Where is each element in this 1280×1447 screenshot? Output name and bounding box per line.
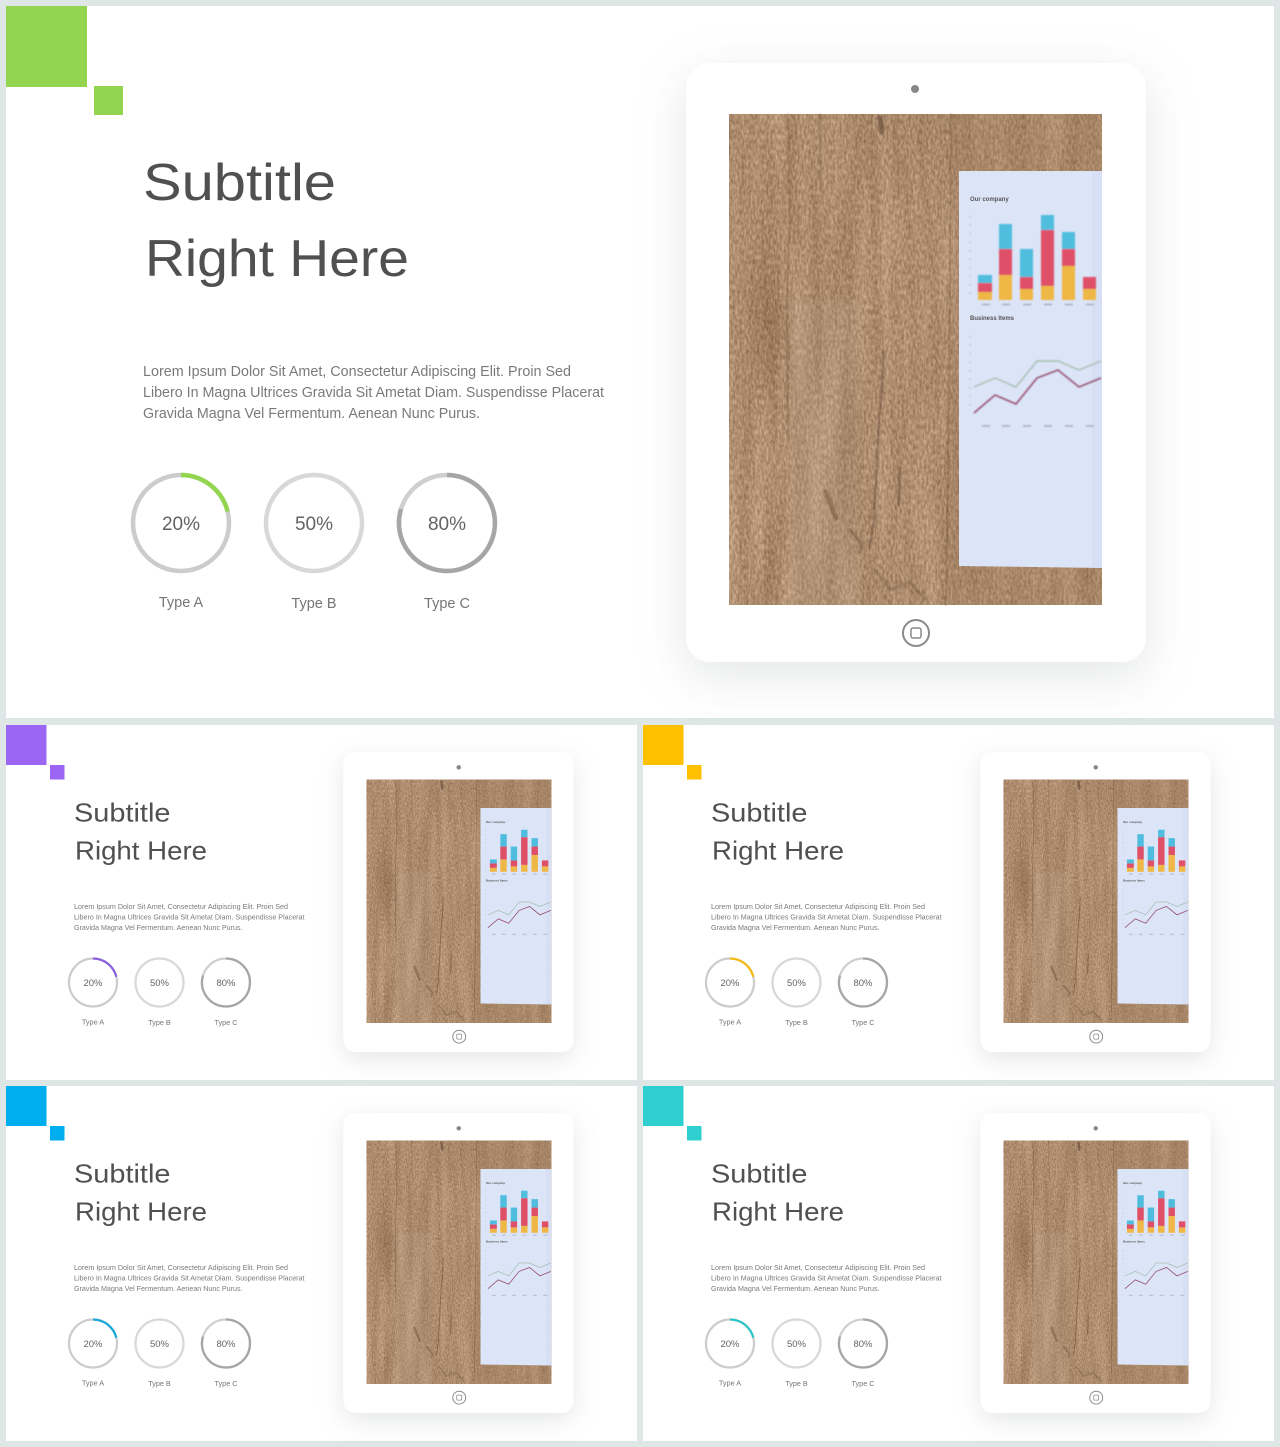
chart: Type B 50% ring: Type B	[291, 596, 337, 612]
body text: Gravida Magna Vel Fermentum. Aenean Nunc Purus.	[74, 1284, 242, 1293]
body text: Libero In Magna Ultrices Gravida Sit Ametat Diam. Suspendisse Placerat	[711, 912, 942, 922]
panel: slide, teal	[643, 1086, 1274, 1441]
panel: main slide, green	[6, 6, 1274, 718]
body text: Libero In Magna Ultrices Gravida Sit Ametat Diam. Suspendisse Placerat	[74, 1274, 304, 1282]
tablet mockup: Business Items	[486, 879, 508, 883]
chart: Type A 20% ring	[69, 958, 117, 1026]
chart: Type A 20% ring: Type A	[719, 1378, 741, 1388]
chart: Type C 80% ring	[202, 1320, 250, 1388]
chart: Type C 80% ring: Type C	[424, 596, 470, 612]
heading: Subtitle	[74, 1158, 170, 1188]
chart: Type C 80% ring	[399, 475, 495, 612]
body text: Gravida Magna Vel Fermentum. Aenean Nunc Purus.	[711, 1284, 880, 1293]
chart: Type B 50% ring: Type B	[785, 1379, 808, 1388]
heading: Right Here	[145, 230, 409, 288]
chart: Type B 50% ring: 50%	[787, 978, 807, 989]
chart: Type A 20% ring: 20%	[83, 978, 103, 989]
chart: Type A 20% ring: 20%	[162, 514, 200, 535]
heading: Subtitle	[711, 798, 808, 828]
chart: Type B 50% ring	[772, 1320, 820, 1388]
heading	[711, 798, 844, 866]
tablet mockup: Business Items	[1123, 1240, 1145, 1244]
chart: Type B 50% ring: Type B	[148, 1018, 171, 1027]
icon: purple corner squares	[6, 725, 64, 780]
heading: Subtitle	[74, 798, 170, 828]
tablet mockup: Our company	[970, 197, 1009, 203]
chart: Type C 80% ring: Type C	[215, 1018, 237, 1027]
chart: Type B 50% ring: 50%	[150, 978, 170, 989]
tablet mockup: Our company	[486, 1181, 505, 1185]
icon: teal corner squares	[643, 1086, 702, 1140]
chart: Type A 20% ring: 20%	[83, 1339, 103, 1350]
body text: Lorem Ipsum Dolor Sit Amet, Consectetur Adipiscing Elit. Proin Sed	[711, 902, 925, 911]
chart: Type A 20% ring	[69, 1320, 117, 1388]
tablet mockup	[343, 1113, 574, 1413]
tablet mockup	[343, 752, 574, 1052]
chart: Type C 80% ring	[839, 958, 887, 1027]
icon: yellow corner squares	[643, 725, 702, 780]
panel: slide, yellow	[643, 725, 1274, 1080]
tablet mockup	[980, 752, 1211, 1052]
heading	[74, 798, 207, 866]
chart: Type B 50% ring	[772, 958, 820, 1027]
chart: Type B 50% ring: 50%	[787, 1339, 807, 1350]
panel: slide, blue	[6, 1086, 637, 1441]
chart: Type A 20% ring	[706, 1320, 754, 1388]
tablet mockup: Our company	[1123, 820, 1142, 824]
chart: Type B 50% ring: 50%	[295, 514, 333, 535]
chart: Type B 50% ring: 50%	[150, 1339, 170, 1350]
chart: Type A 20% ring: Type A	[82, 1378, 104, 1388]
heading	[74, 1158, 207, 1226]
body text: Gravida Magna Vel Fermentum. Aenean Nunc Purus.	[143, 406, 480, 422]
chart: Type B 50% ring	[266, 475, 362, 612]
body text: Lorem Ipsum Dolor Sit Amet, Consectetur Adipiscing Elit. Proin Sed	[74, 902, 288, 911]
body text: Libero In Magna Ultrices Gravida Sit Ametat Diam. Suspendisse Placerat	[143, 385, 604, 401]
chart: Type C 80% ring: 80%	[216, 978, 236, 989]
body text	[74, 902, 304, 932]
chart: Type C 80% ring	[839, 1320, 887, 1388]
chart: Type B 50% ring	[136, 1320, 184, 1388]
tablet mockup: Business Items	[970, 316, 1015, 322]
chart: Type C 80% ring: Type C	[852, 1018, 874, 1027]
body text	[143, 364, 604, 422]
chart: Type B 50% ring: Type B	[148, 1379, 171, 1388]
chart: Type B 50% ring: Type B	[785, 1018, 808, 1027]
chart: Type C 80% ring: 80%	[853, 1339, 873, 1350]
tablet mockup: Business Items	[1123, 879, 1145, 883]
panel: slide, purple	[6, 725, 637, 1080]
icon: blue corner squares	[6, 1086, 64, 1140]
body text: Gravida Magna Vel Fermentum. Aenean Nunc Purus.	[711, 923, 880, 932]
heading: Right Here	[712, 1196, 844, 1226]
chart: Type A 20% ring	[706, 958, 754, 1026]
chart: Type A 20% ring: Type A	[159, 595, 203, 611]
chart: Type A 20% ring: Type A	[82, 1018, 104, 1026]
heading: Subtitle	[711, 1158, 808, 1188]
tablet mockup	[686, 63, 1146, 662]
heading: Right Here	[712, 836, 844, 866]
heading	[143, 154, 409, 288]
chart: Type C 80% ring: 80%	[428, 514, 466, 535]
body text: Lorem Ipsum Dolor Sit Amet, Consectetur Adipiscing Elit. Proin Sed	[74, 1263, 288, 1272]
body text: Gravida Magna Vel Fermentum. Aenean Nunc Purus.	[74, 923, 242, 932]
chart: Type C 80% ring: Type C	[852, 1379, 874, 1388]
heading: Subtitle	[143, 154, 336, 212]
body text	[74, 1263, 304, 1293]
tablet mockup: Business Items	[486, 1240, 508, 1244]
heading: Right Here	[75, 1196, 207, 1226]
chart: Type A 20% ring: Type A	[719, 1018, 741, 1026]
icon: green corner squares	[6, 6, 123, 115]
chart: Type C 80% ring: Type C	[215, 1379, 237, 1388]
body text: Lorem Ipsum Dolor Sit Amet, Consectetur Adipiscing Elit. Proin Sed	[143, 364, 571, 380]
chart: Type B 50% ring	[136, 958, 184, 1027]
chart: Type A 20% ring: 20%	[720, 978, 740, 989]
body text: Libero In Magna Ultrices Gravida Sit Ametat Diam. Suspendisse Placerat	[74, 912, 304, 922]
body text	[711, 1263, 942, 1293]
heading	[711, 1158, 844, 1226]
tablet mockup	[980, 1113, 1211, 1413]
tablet mockup: Our company	[1123, 1181, 1142, 1185]
body text	[711, 902, 942, 932]
chart: Type C 80% ring: 80%	[853, 978, 873, 989]
body text: Libero In Magna Ultrices Gravida Sit Ametat Diam. Suspendisse Placerat	[711, 1274, 942, 1282]
chart: Type A 20% ring	[133, 475, 229, 611]
heading: Right Here	[75, 836, 207, 866]
chart: Type C 80% ring	[202, 958, 250, 1027]
chart: Type C 80% ring: 80%	[216, 1339, 236, 1350]
chart: Type A 20% ring: 20%	[720, 1339, 740, 1350]
tablet mockup: Our company	[486, 820, 505, 824]
body text: Lorem Ipsum Dolor Sit Amet, Consectetur Adipiscing Elit. Proin Sed	[711, 1263, 925, 1272]
